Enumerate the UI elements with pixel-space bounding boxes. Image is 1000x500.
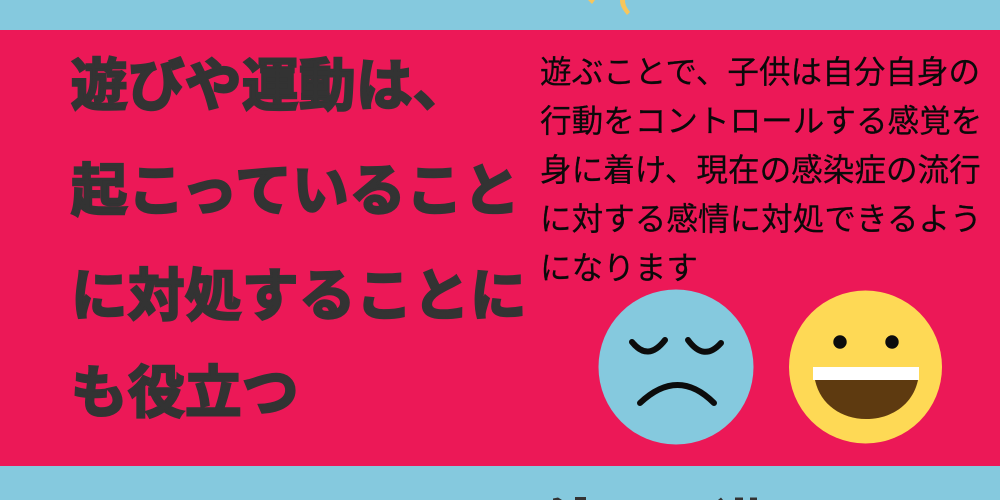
heading: play and exercise help [70, 54, 527, 424]
text block: explanation: になります [540, 250, 698, 286]
heading: play and exercise help: 遊びや運動は、 [71, 54, 470, 117]
text block: explanation: 遊ぶことで、子供は自分自身の [540, 54, 980, 90]
text block: explanation: に対する感情に対処できるよう [540, 201, 982, 237]
heading: play and exercise help: 起こっていること [71, 159, 520, 222]
text block: explanation: 身に着け、現在の感染症の流行 [540, 152, 981, 188]
icon: sad face [598, 290, 754, 444]
icon: cropped figure feet at top [588, 0, 630, 15]
text block: explanation: 行動をコントロールする感覚を [540, 103, 982, 139]
heading: play and exercise help: に対処することに [71, 264, 527, 327]
text block: explanation [540, 54, 982, 286]
text: cropped next heading at bottom [553, 497, 757, 500]
heading: play and exercise help: も役立つ [71, 361, 299, 424]
icon: laughing face [789, 290, 942, 444]
